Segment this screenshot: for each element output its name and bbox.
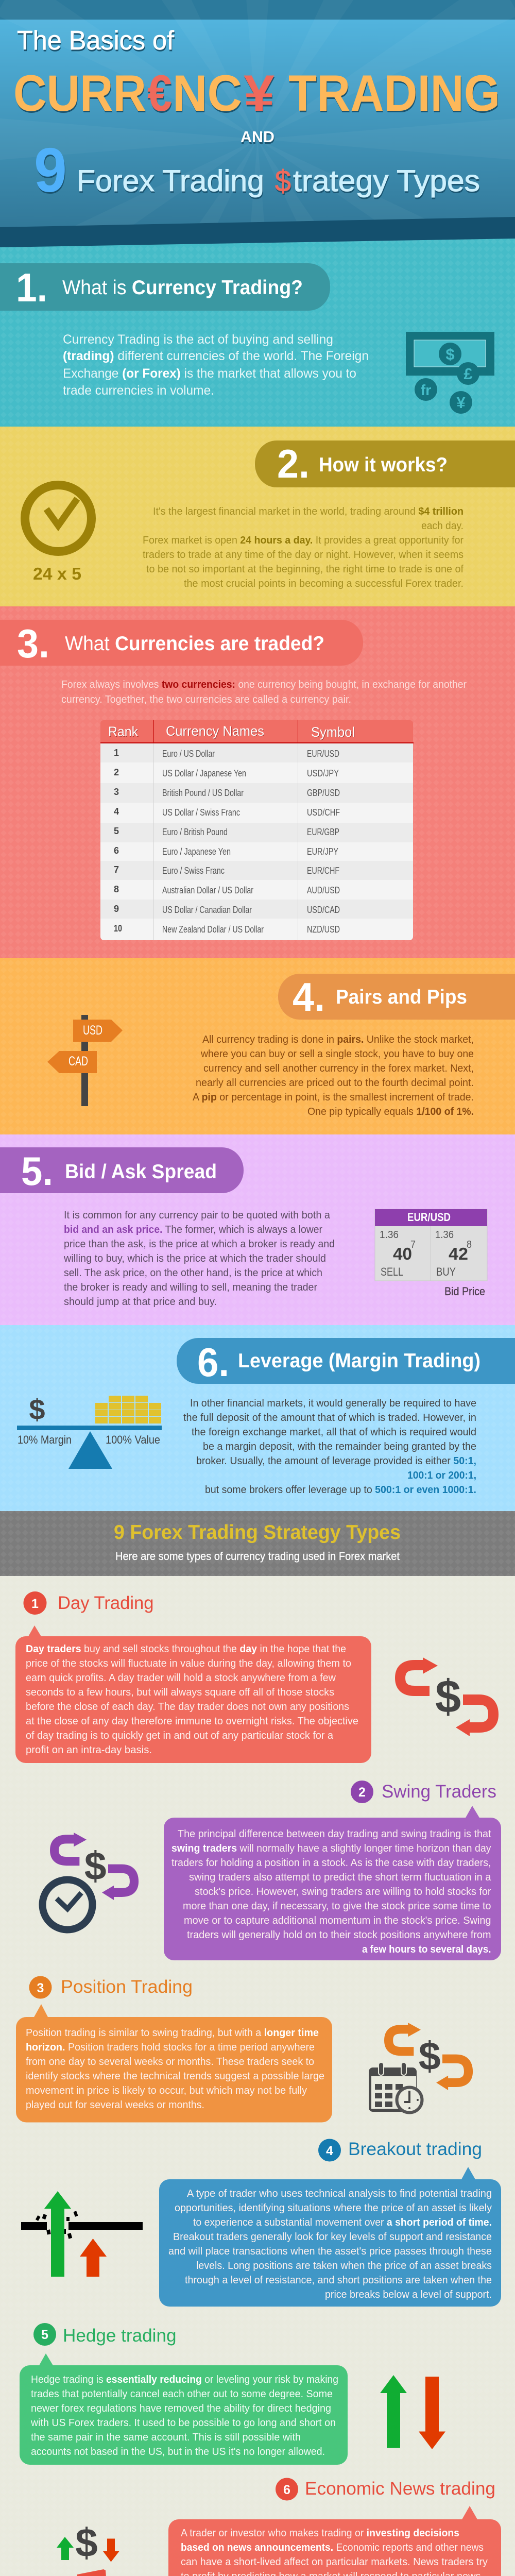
section heading 4: 4. [293, 974, 325, 1020]
title line: Currency Trading: NC [173, 64, 242, 122]
strategy title: Hedge trading [63, 2326, 176, 2346]
icon: banknote and coins [406, 332, 494, 414]
section heading 4 [278, 974, 515, 1020]
icon: banknote and coins: $ [445, 345, 455, 363]
table header row [108, 723, 355, 740]
table currency names column: New Zealand Dollar / US Dollar [162, 924, 264, 935]
text: pairs and pips explanation: One pip typically equals 1/100 of 1%. [307, 1106, 474, 1117]
panel: strategy list background [0, 1576, 515, 2576]
number badge 1: 1 [31, 1597, 39, 1611]
table currency names column: US Dollar / Swiss Franc [162, 807, 240, 818]
icon: leverage balance scale: 10% Margin [18, 1433, 72, 1446]
section heading 6: 6. [197, 1340, 229, 1385]
table: top currency pairs [100, 720, 414, 940]
table symbol column: EUR/GBP [307, 827, 339, 837]
table header row: Symbol [311, 724, 355, 740]
title line: The Basics of: The Basics of [17, 26, 175, 56]
text: market description: to be not so important at the beginning, the right time to trade is one of [146, 564, 464, 575]
strategy title: Swing Traders [382, 1782, 496, 1802]
speech bubble: position trading: played out for several weeks or months. [26, 2099, 204, 2111]
speech bubble: economic news trading: can have a short-lived affect on particular markets. News traders try [181, 2556, 488, 2568]
table currency names column: Euro / US Dollar [162, 749, 215, 759]
icon: dollar with arrows: $ [75, 2520, 98, 2565]
section heading 5: 5. [21, 1148, 53, 1194]
widget: EUR/USD quote: EUR/USD [407, 1211, 451, 1224]
section heading 5 [0, 1147, 244, 1194]
number badge 3: 3 [37, 1981, 44, 1995]
text: two currencies explanation [61, 679, 467, 705]
text: pairs and pips explanation: where you can buy or sell a single stock, you have to buy one [200, 1048, 474, 1060]
table symbol column: EUR/CHF [307, 866, 339, 876]
text: bid ask explanation: sell. The ask price, on the other hand, is the price at which [64, 1267, 322, 1279]
speech bubble: day trading: profit on an intra-day basis. [26, 1744, 152, 1756]
speech bubble: swing traders: stock's price. However, swing traders are willing to hold stocks for [195, 1886, 491, 1897]
text: leverage explanation: broker. Usually, the amount of leverage provided is either 50:1, [196, 1455, 476, 1467]
text: bid ask explanation: should jump at that price and buy. [64, 1296, 217, 1308]
text: currency trading definition [63, 332, 369, 398]
icon: USD CAD signpost: CAD [68, 1054, 88, 1069]
number badge 6: 6 [283, 2483, 290, 2497]
section heading 3: 3. [17, 621, 49, 666]
table rank column [114, 748, 122, 934]
strategy 1: day trading [15, 1591, 493, 1763]
table currency names column: Euro / Swiss Franc [162, 866, 225, 876]
speech bubble: day trading: before the close of each day. The day trader does not own any positions [26, 1701, 349, 1713]
table rank column: 3 [114, 787, 119, 797]
text: pairs and pips explanation [193, 1033, 474, 1117]
panel: 1 what is currency trading [0, 239, 515, 427]
text: market description: It's the largest financial market in the world, trading around $4 trillion [153, 506, 464, 517]
section heading 1 [0, 263, 330, 311]
strategy title: Position Trading [61, 1977, 193, 1997]
speech bubble: breakout trading: opportunities, identifying situations where the price of an asset is likely [175, 2202, 492, 2214]
title line: Currency Trading: € [147, 64, 172, 122]
table rank column: 10 [114, 923, 122, 934]
widget: EUR/USD quote: 40 [393, 1244, 412, 1263]
table rank column: 9 [114, 904, 119, 914]
table symbol column: NZD/USD [307, 924, 340, 935]
text: market description [143, 506, 464, 589]
widget: EUR/USD quote: 8 [467, 1239, 472, 1250]
speech bubble: hedge trading [20, 2353, 348, 2465]
speech bubble: position trading [16, 2004, 332, 2123]
strategy 6: economic news trading [55, 2478, 501, 2576]
table header row: Currency Names [166, 723, 264, 739]
text: bid ask explanation: price than the ask, is the price at which a broker is ready and [64, 1238, 335, 1250]
number badge 5 [33, 2323, 56, 2346]
table currency names column: Euro / British Pound [162, 827, 228, 837]
icon: up and down arrows [380, 2375, 445, 2449]
table rank column: 6 [114, 845, 119, 856]
label: 24 x 5: 24 x 5 [33, 564, 81, 583]
section heading 1: 1. [16, 265, 47, 310]
icon: leverage balance scale: $ [29, 1393, 45, 1426]
table symbol column: GBP/USD [307, 788, 340, 798]
title line: Currency Trading [13, 64, 500, 122]
panel: 5 bid ask spread [0, 1134, 515, 1325]
text: bid ask explanation: bid and an ask price. The former, which is always a lower [64, 1224, 322, 1235]
number badge 2: 2 [358, 1785, 366, 1800]
speech bubble: swing traders: The principal difference between day trading and swing trading is that [178, 1828, 491, 1840]
text: pairs and pips explanation: A pip or percentage in point, is the smallest increment of trade. [193, 1091, 474, 1103]
icon: swap arrows with calendar: $ [419, 2035, 441, 2079]
strategy 5: hedge trading [20, 2323, 445, 2465]
panel: strategy types banner [0, 1511, 515, 1576]
speech bubble: swing traders: swing traders will normally have a slightly longer time horizon than day [171, 1842, 491, 1854]
widget: EUR/USD quote: BUY [436, 1265, 456, 1278]
text: leverage explanation: 100:1 or 200:1, [407, 1469, 476, 1481]
text: leverage explanation: be a margin deposit, with the remainder being granted by the [203, 1440, 476, 1452]
panel: title header [0, 0, 515, 428]
icon: clock with check mark [25, 485, 92, 551]
number badge 3 [29, 1976, 52, 1999]
widget: EUR/USD quote: 42 [449, 1244, 468, 1263]
speech bubble: position trading: movement in price is likely to occur, but which may not be fully [26, 2084, 307, 2096]
speech bubble: economic news trading [168, 2506, 501, 2576]
speech bubble: hedge trading: the same pair in the same account. This is still possible with [31, 2431, 301, 2443]
text: market description: the most crucial points in becoming a successful Forex trader. [184, 578, 464, 589]
speech bubble: swing traders: traders will generally hold on to their stock positions anywhere from [187, 1929, 491, 1941]
icon: leverage balance scale: 100% Value [106, 1433, 160, 1446]
section heading 2: How it works? [319, 454, 448, 476]
section heading 6: Leverage (Margin Trading) [238, 1350, 480, 1372]
text: leverage explanation: In other financial markets, it would generally be required to have [190, 1397, 476, 1409]
widget: EUR/USD quote: 1.36 [435, 1229, 454, 1241]
icon: banknote and coins: £ [464, 365, 473, 383]
table symbol column: USD/CAD [307, 905, 340, 915]
icon: swap arrows with clock [42, 1833, 134, 1930]
speech bubble: breakout trading: A type of trader who uses technical analysis to find potential trading [187, 2188, 492, 2199]
icon: banknote and coins: fr [421, 382, 431, 399]
section heading 1: What is Currency Trading? [62, 277, 303, 299]
text: currency trading definition: trade currencies in volume. [63, 383, 214, 398]
strategy 4: breakout trading [21, 2139, 501, 2307]
table rank column: 2 [114, 767, 119, 777]
text: two currencies explanation: Forex always involves two currencies: one currency being bought, in exchange for another [61, 679, 467, 690]
speech bubble: swing traders: move or to capture additional momentum in the stock's price. Swing [184, 1914, 491, 1926]
number badge 1 [24, 1591, 46, 1615]
text: bid ask explanation [63, 1209, 335, 1308]
title line: Currency Trading: ¥ [244, 64, 274, 122]
title line: 9 Forex Trading Strategy Types: Forex Trading [77, 164, 264, 198]
table symbol column: USD/CHF [307, 807, 340, 818]
speech bubble: position trading: from one day to several weeks or months. These traders seek to [26, 2056, 314, 2067]
speech bubble: breakout trading: price breaks below a level of support. [325, 2289, 492, 2300]
strategy 2: swing traders [42, 1781, 501, 1960]
title line: 9 Forex Trading Strategy Types: $ [275, 164, 291, 198]
speech bubble: hedge trading: newer forex regulations have removed the ability for direct hedging [31, 2402, 331, 2414]
speech bubble: swing traders: more than one day, if necessary, to give the stock price some time to [183, 1900, 491, 1912]
panel: 2 how it works [0, 427, 515, 606]
text: leverage explanation [183, 1397, 476, 1496]
speech bubble: breakout trading: Breakout traders generally look for key levels of support and resistance [173, 2231, 492, 2243]
title line: 9 Forex Trading Strategy Types: 9 [34, 135, 67, 205]
strategy title: Economic News trading [305, 2479, 495, 2499]
table symbol column [307, 749, 340, 935]
table currency names column: US Dollar / Canadian Dollar [162, 905, 252, 915]
number badge 4 [318, 2139, 341, 2162]
title line: 9 Forex Trading Strategy Types: trategy Types [293, 164, 480, 198]
text: leverage explanation: but some brokers offer leverage up to 500:1 or even 1000:1. [205, 1484, 476, 1496]
text: currency trading definition: Exchange (or Forex) is the market that allows you to [63, 366, 356, 381]
text: two currencies explanation: currency. Together, the two currencies are called a currency pair. [61, 693, 351, 705]
speech bubble: position trading: Position trading is similar to swing trading, but with a longer time [26, 2027, 319, 2039]
speech bubble: day trading: price of the stocks will fluctuate in value during the day, allowing them to [26, 1657, 351, 1669]
speech bubble: breakout trading [159, 2167, 501, 2307]
panel: 3 what currencies are traded [0, 606, 515, 958]
speech bubble: position trading: horizon. Position traders hold stocks for a time period anywhere [26, 2041, 315, 2053]
section heading 5: Bid / Ask Spread [65, 1161, 217, 1183]
icon: breakout arrows through resistance bar [21, 2191, 143, 2277]
text: bid ask explanation: It is common for any currency pair to be quoted with both a [64, 1209, 331, 1221]
text: bid ask explanation: the broker is ready and willing to sell, meaning the trader [64, 1281, 317, 1293]
speech bubble: swing traders [164, 1806, 501, 1960]
widget: EUR/USD quote [375, 1209, 487, 1281]
title line: Currency Trading: CURR [13, 64, 146, 122]
table symbol column: EUR/USD [307, 749, 339, 759]
speech bubble: swing traders: swing traders also attempt to predict the short term fluctuation in a [189, 1871, 491, 1883]
section heading 4: Pairs and Pips [336, 986, 467, 1008]
table rank column: 5 [114, 826, 119, 836]
section heading 6 [177, 1338, 515, 1385]
title line: AND: AND [241, 128, 274, 146]
panel: 4 pairs and pips [0, 958, 515, 1134]
text: market description: each day. [421, 520, 464, 532]
label: bid price: Bid Price [444, 1285, 485, 1298]
text: currency trading definition: (trading) different currencies of the world. The Foreign [63, 349, 369, 363]
table currency names column [162, 749, 264, 935]
section heading 3: What Currencies are traded? [65, 633, 324, 655]
speech bubble: economic news trading: A trader or investor who makes trading or investing decisions [181, 2527, 459, 2539]
speech bubble: day trading: of day trading is to quickly get in and out of any particular stock for a [26, 1730, 334, 1741]
speech bubble: day trading: earn quick profits. A day trader will hold a stock anywhere from a few [26, 1672, 336, 1684]
speech bubble: hedge trading: accounts not based in the US, but in the US it's no longer allowed. [31, 2446, 325, 2458]
text: leverage explanation: the full deposit of the amount that of which is traded. However, in [183, 1412, 476, 1423]
strategy title: Breakout trading [348, 2139, 482, 2159]
text: pairs and pips explanation: currency and sell another currency in the forex market. Next, [203, 1062, 474, 1074]
widget: EUR/USD quote: SELL [381, 1265, 403, 1278]
speech bubble: day trading: seconds to a few hours, but will always square off all of those stocks [26, 1686, 334, 1698]
speech bubble: breakout trading: levels. Long positions are taken when the price of an asset breaks [196, 2260, 492, 2272]
speech bubble: swing traders: a few hours to several days. [362, 1943, 491, 1955]
icon: USD CAD signpost [47, 1015, 123, 1106]
number badge 4: 4 [326, 2144, 333, 2158]
panel: 6 leverage [0, 1325, 515, 1511]
text: pairs and pips explanation: nearly all currencies are priced out to the fourth decimal point. [196, 1077, 474, 1089]
speech bubble: position trading: identify stocks where the technical trends suggest a possible large [26, 2070, 324, 2082]
text: currency trading definition: Currency Trading is the act of buying and selling [63, 332, 333, 347]
strategy title: Day Trading [58, 1593, 153, 1613]
table currency names column: Australian Dollar / US Dollar [162, 885, 253, 895]
speech bubble: hedge trading: Hedge trading is essentially reducing or leveling your risk by making [31, 2374, 338, 2385]
icon: swap arrows with calendar [369, 2023, 468, 2112]
text: bid ask explanation: willing to buy, which is the price at which the trader should [63, 1252, 326, 1264]
icon: banknote and coins: ¥ [456, 394, 466, 412]
text: market description: Forex market is open 24 hours a day. It provides a great opportunity for [143, 535, 464, 546]
table rank column: 1 [114, 748, 119, 758]
banner subheading: Here are some types of currency trading used in Forex market [115, 1550, 400, 1563]
speech bubble: day trading [15, 1625, 371, 1763]
title line: Currency Trading: TRADING [288, 64, 500, 122]
icon: dollar with swap arrows [400, 1657, 493, 1736]
table currency names column: US Dollar / Japanese Yen [162, 768, 246, 778]
speech bubble: swing traders: traders for holding a position in a stock. As is the case with day traders, [171, 1857, 491, 1869]
table rank column: 8 [114, 884, 119, 894]
icon: swap arrows with clock: $ [84, 1844, 107, 1889]
text: market description: traders to trade at any time of the day or night. However, when it seems [143, 549, 464, 561]
text: pairs and pips explanation: All currency trading is done in pairs. Unlike the stock market, [202, 1033, 474, 1045]
speech bubble: hedge trading: with US Forex traders. It used to be possible to go long and short on [30, 2417, 336, 2429]
speech bubble: hedge trading: trades that potentially cancel each other out to some degree. Some [31, 2388, 333, 2400]
text: leverage explanation: the foreign exchange market, all that of which is required would [192, 1426, 476, 1438]
icon: newspaper [55, 2569, 114, 2576]
icon: dollar with swap arrows: $ [435, 1671, 461, 1723]
section heading 2: 2. [277, 441, 310, 486]
number badge 2 [351, 1781, 373, 1803]
number badge 6 [276, 2478, 298, 2501]
table rank column: 4 [114, 806, 119, 817]
widget: EUR/USD quote: 7 [410, 1239, 416, 1250]
icon: USD CAD signpost: USD [83, 1023, 102, 1038]
speech bubble: economic news trading: based on news announcements. Economic reports and other news [181, 2541, 484, 2553]
speech bubble: day trading: Day traders buy and sell stocks throughout the day in the hope that the [26, 1643, 346, 1655]
table header row: Rank [108, 724, 138, 739]
section heading 3 [0, 620, 363, 666]
title line: 9 Forex Trading Strategy Types [34, 135, 480, 205]
table rank column: 7 [114, 865, 119, 875]
strategy 3: position trading [16, 1976, 468, 2123]
table currency names column: Euro / Japanese Yen [162, 846, 231, 857]
speech bubble: breakout trading: to experience a substantial movement over a short period of time. [193, 2216, 492, 2228]
number badge 5: 5 [41, 2328, 48, 2342]
section heading 2 [255, 440, 515, 487]
speech bubble: day trading: at the close of any day therefore immune to overnight risks. The objective [26, 1715, 358, 1727]
speech bubble: breakout trading: and will place transactions when the asset's price passes through these [168, 2245, 492, 2257]
table currency names column: British Pound / US Dollar [162, 788, 244, 798]
table symbol column: USD/JPY [307, 768, 339, 778]
banner heading: 9 Forex Trading Strategy Types [114, 1521, 401, 1544]
table symbol column: EUR/JPY [307, 846, 338, 857]
widget: EUR/USD quote: 1.36 [380, 1229, 399, 1241]
icon: leverage balance scale [17, 1393, 162, 1469]
icon: dollar with arrows [57, 2520, 119, 2565]
speech bubble: breakout trading: through a level of resistance, and short positions are taken when the [185, 2274, 492, 2286]
table symbol column: AUD/USD [307, 885, 340, 895]
